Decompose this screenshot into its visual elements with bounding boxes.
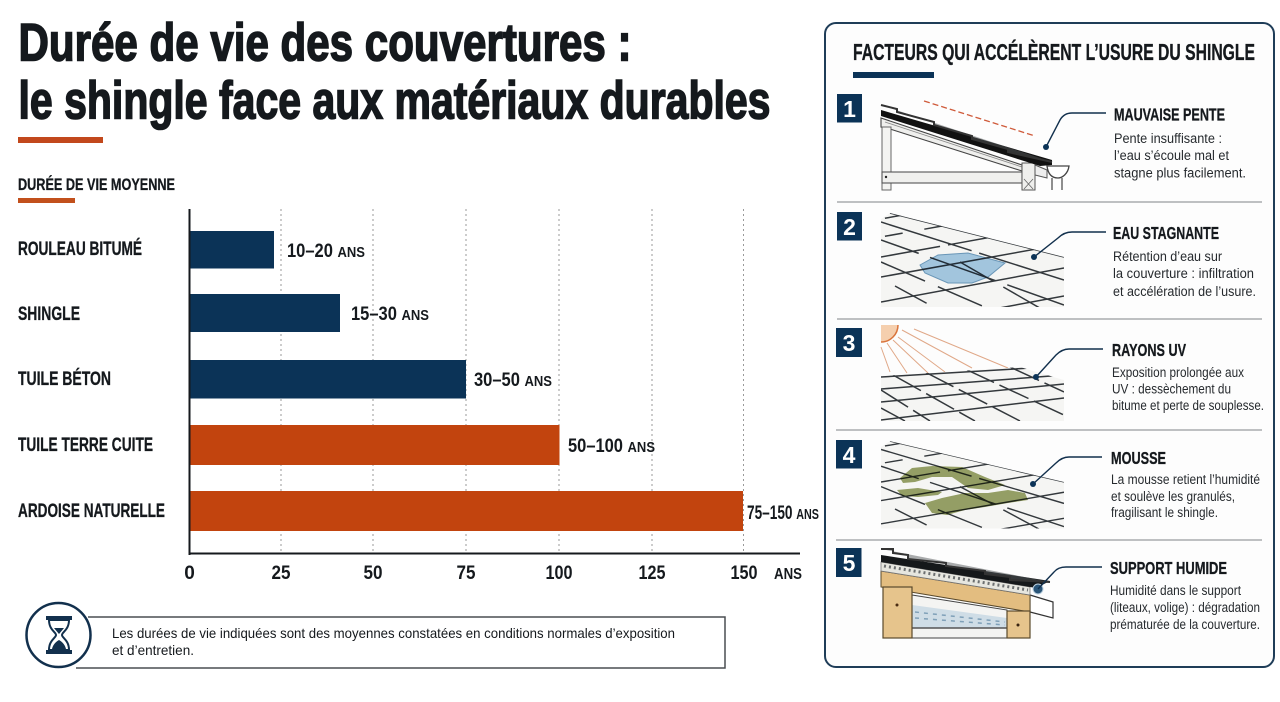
axis labels: 25: [272, 563, 291, 584]
text 4: et soulève les granulés,: [1111, 489, 1235, 504]
illustration: roof slope: [881, 101, 1069, 190]
bar: shingle: [18, 294, 429, 332]
illustration: water on shingles: [881, 197, 1064, 330]
badge 5: [836, 548, 862, 577]
text 1: stagne plus facilement.: [1114, 166, 1246, 180]
axis labels: [184, 563, 802, 584]
axis labels: 50: [364, 563, 382, 584]
text 2: et accélération de l’usure.: [1113, 284, 1256, 299]
text 2: [1113, 223, 1256, 299]
panel heading: [853, 38, 1255, 78]
text 4: [1111, 448, 1260, 520]
text 5: Humidité dans le support: [1110, 583, 1241, 598]
text 5: SUPPORT HUMIDE: [1110, 558, 1227, 578]
text 2: EAU STAGNANTE: [1113, 223, 1219, 243]
badge 3: 3: [843, 330, 855, 356]
axis labels: 0: [184, 563, 195, 584]
chart heading: DURÉE DE VIE MOYENNE: [18, 175, 175, 194]
text 1: [1114, 104, 1246, 180]
note box: Les durées de vie indiquées sont des moyennes constatées en conditions normales d’exposition: [112, 625, 675, 641]
leader 2: [1031, 232, 1106, 260]
bar: shingle: SHINGLE: [18, 303, 80, 325]
text 3: UV : dessèchement du: [1112, 382, 1231, 396]
text 5: (liteaux, volige) : dégradation: [1110, 600, 1260, 615]
leader 4: [1030, 457, 1102, 487]
bar: tuile terre cuite: 50–100 ANS: [568, 436, 655, 457]
illustration: sun and shingles: [880, 325, 1064, 421]
leader 5: [1038, 567, 1102, 589]
text 4: La mousse retient l’humidité: [1111, 472, 1260, 487]
badge 3: [836, 328, 862, 357]
leader 3: [1033, 349, 1103, 380]
factor 3: rayons UV: [836, 325, 1263, 421]
bar: ardoise naturelle: ARDOISE NATURELLE: [18, 500, 165, 522]
text 3: [1112, 340, 1264, 413]
bar: tuile béton: [18, 360, 552, 398]
title: Durée de vie des couvertures :: [18, 14, 632, 72]
factor 5: support humide: [836, 548, 1260, 638]
text 4: MOUSSE: [1111, 448, 1166, 468]
note box: [76, 617, 725, 668]
text 5: prématurée de la couverture.: [1110, 617, 1260, 632]
text 5: [1110, 558, 1260, 632]
badge 1: 1: [843, 96, 856, 122]
text 2: Rétention d’eau sur: [1113, 249, 1222, 264]
title: [18, 14, 770, 130]
factor 2: eau stagnante: [837, 197, 1256, 330]
factor 1: mauvaise pente: [837, 94, 1246, 190]
bar: tuile terre cuite: TUILE TERRE CUITE: [18, 434, 153, 456]
bar: ardoise naturelle: 75–150 ANS: [747, 503, 819, 524]
badge 2: 2: [843, 214, 856, 240]
illustration: roof section: [881, 549, 1053, 638]
bar: tuile béton: 30–50 ANS: [474, 370, 552, 391]
bar: shingle: 15–30 ANS: [351, 304, 429, 325]
text 3: RAYONS UV: [1112, 340, 1186, 360]
text 1: MAUVAISE PENTE: [1114, 104, 1225, 124]
chart axes: [189, 209, 800, 555]
illustration: moss on shingles: [881, 426, 1064, 550]
text 1: Pente insuffisante :: [1114, 131, 1222, 146]
axis labels: 75: [456, 563, 476, 584]
factor 4: mousse: [836, 426, 1260, 550]
text 3: Exposition prolongée aux: [1112, 365, 1244, 380]
text 4: fragilisant le shingle.: [1111, 505, 1218, 520]
panel: factors: [825, 23, 1274, 667]
badge 4: [836, 440, 862, 468]
bar: tuile terre cuite: [18, 425, 655, 465]
badge 4: 4: [843, 442, 856, 468]
badge 2: [837, 212, 862, 240]
icon: hourglass: [26, 603, 90, 667]
badge 1: [837, 94, 862, 122]
bar: rouleau bitumé: ROULEAU BITUMÉ: [18, 237, 142, 260]
chart heading: [18, 175, 175, 203]
bar: rouleau bitumé: [18, 231, 365, 268]
text 2: la couverture : infiltration: [1113, 266, 1254, 281]
bar: rouleau bitumé: 10–20 ANS: [287, 241, 365, 262]
leader 1: [1043, 113, 1106, 150]
axis labels: 150: [730, 563, 758, 584]
badge 5: 5: [843, 550, 856, 576]
bar: ardoise naturelle: [18, 491, 819, 531]
text 1: l’eau s’écoule mal et: [1114, 148, 1229, 163]
axis labels: 125: [638, 563, 666, 584]
bar chart: lifespan by material: [18, 209, 819, 584]
title: le shingle face aux matériaux durables: [18, 72, 770, 130]
title underline: [18, 137, 103, 143]
axis labels: 100: [546, 563, 572, 584]
axis labels: ANS: [774, 566, 802, 583]
note box: et d’entretien.: [112, 642, 194, 658]
bar: tuile béton: TUILE BÉTON: [18, 367, 111, 390]
